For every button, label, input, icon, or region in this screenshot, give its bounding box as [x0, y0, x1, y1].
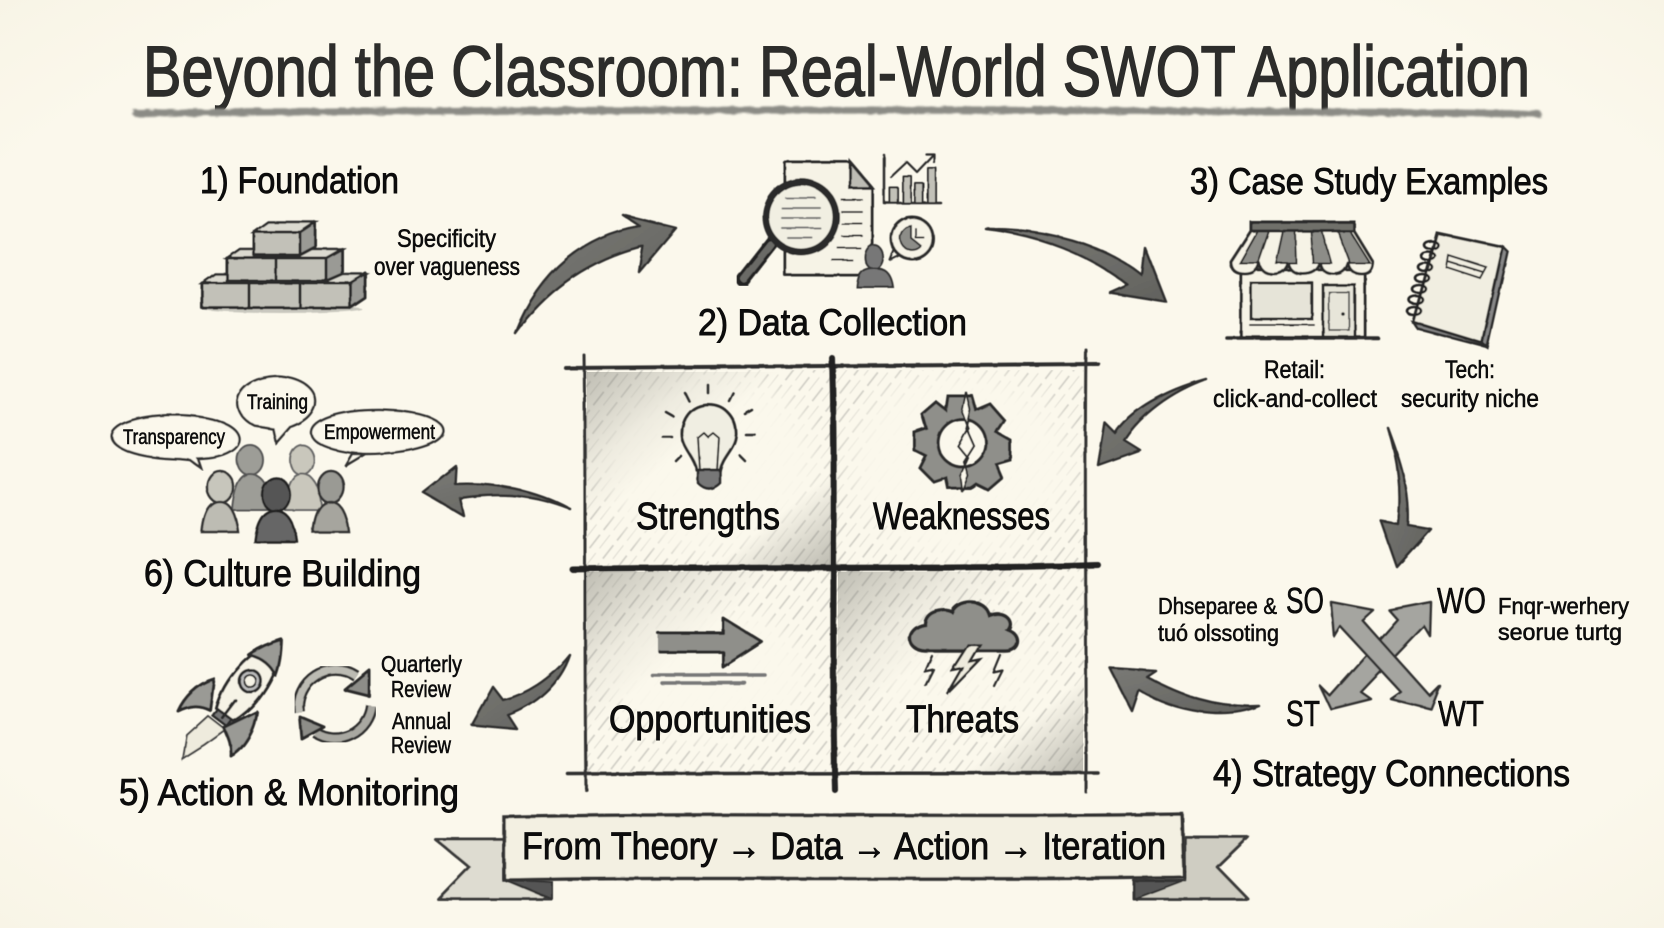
icon: retail storefront	[1227, 222, 1378, 338]
panel: 1 foundation	[200, 160, 520, 313]
text: review cadence: Review	[391, 676, 451, 702]
cell: strengths	[636, 385, 780, 538]
text: tech: security niche	[1401, 385, 1539, 413]
cell shading	[580, 355, 1090, 772]
speech bubble: empowerment: Empowerment	[324, 421, 435, 444]
heading: foundation: 1) Foundation	[200, 160, 399, 201]
text: left note: tuó olssoting	[1158, 620, 1279, 646]
arrow: foundation to data collection	[515, 215, 676, 333]
icon: crossing double arrows	[1320, 602, 1440, 709]
banner body	[504, 814, 1184, 880]
title underline brush stroke	[136, 110, 1538, 114]
arrow: case studies to swot grid	[1098, 379, 1206, 465]
icon: person with chart bubble	[857, 217, 933, 287]
text: tech	[1401, 356, 1539, 413]
text: right note: Fnqr-werhery	[1498, 593, 1629, 619]
icon: cracked gear	[914, 392, 1010, 492]
text: review cadence	[381, 651, 462, 758]
icon: brick pyramid	[202, 222, 365, 313]
text: right note: seorue turtg	[1498, 619, 1622, 645]
banner: from theory to iteration	[435, 814, 1248, 899]
speech bubble: transparency: Transparency	[123, 426, 225, 449]
text: specificity: over vagueness	[374, 253, 520, 281]
panel: 6 culture building	[112, 376, 443, 594]
arrow: case studies to strategy connections	[1381, 428, 1431, 567]
heading: action and monitoring: 5) Action & Monitoring	[119, 772, 459, 813]
cell: opportunities	[609, 618, 811, 741]
text: left note: Dhseparee &	[1158, 593, 1277, 619]
heading: culture building: 6) Culture Building	[144, 553, 421, 594]
label: opportunities: Opportunities	[609, 699, 811, 741]
labels: so wo st wt: WT	[1438, 693, 1484, 734]
panel: swot matrix	[566, 350, 1098, 792]
text: review cadence: Review	[391, 732, 451, 758]
icon: light bulb	[663, 385, 755, 488]
banner left tail	[435, 839, 552, 899]
speech bubble: empowerment	[311, 410, 443, 466]
icon: rocket	[178, 629, 295, 759]
speech bubble: training	[237, 376, 315, 443]
banner text: From Theory → Data → Action → Iteration	[522, 826, 1166, 868]
icon: review cycle	[299, 670, 372, 739]
icon: storm cloud	[910, 602, 1017, 694]
text: retail: Retail:	[1264, 356, 1325, 384]
banner right tail	[1134, 837, 1248, 899]
label: threats: Threats	[906, 699, 1019, 741]
labels: so wo st wt	[1286, 580, 1486, 734]
text: retail	[1213, 356, 1377, 413]
text: tech: Tech:	[1445, 356, 1495, 384]
label: weaknesses: Weaknesses	[873, 496, 1050, 538]
cell: threats	[906, 602, 1019, 741]
icon: spiral notebook	[1407, 233, 1508, 347]
heading: case study examples: 3) Case Study Examples	[1190, 161, 1548, 202]
speech bubble: transparency	[112, 415, 240, 468]
grid frame	[566, 350, 1098, 792]
arrow: strategy connections to swot grid	[1110, 668, 1259, 713]
icon: forward arrow	[652, 618, 765, 683]
icon: bar chart	[884, 154, 941, 203]
panel: 3 case study examples	[1190, 161, 1548, 413]
arrow: swot grid to culture	[423, 466, 570, 516]
labels: so wo st wt: SO	[1286, 580, 1324, 621]
icon: document and magnifier	[743, 162, 872, 280]
icon: group of people	[202, 445, 349, 542]
labels: so wo st wt: ST	[1286, 693, 1320, 734]
heading: strategy connections: 4) Strategy Connections	[1213, 753, 1570, 794]
text: retail: click-and-collect	[1213, 385, 1377, 413]
panel: 4 strategy connections	[1158, 580, 1629, 794]
label: strengths: Strengths	[636, 496, 780, 538]
speech bubble: training: Training	[247, 391, 308, 414]
text: specificity	[374, 225, 520, 281]
arrow: swot grid to action	[472, 655, 570, 729]
text: review cadence: Quarterly	[381, 651, 462, 677]
text: left note	[1158, 593, 1279, 646]
text: review cadence: Annual	[392, 708, 451, 734]
panel: 2 data collection	[698, 154, 967, 343]
text: specificity: Specificity	[397, 225, 496, 253]
labels: so wo st wt: WO	[1437, 580, 1486, 621]
text: right note	[1498, 593, 1629, 645]
arrow: data collection to case studies	[986, 229, 1166, 302]
panel: 5 action and monitoring	[119, 629, 462, 813]
heading: data collection: 2) Data Collection	[698, 302, 967, 343]
cell: weaknesses	[873, 392, 1050, 538]
